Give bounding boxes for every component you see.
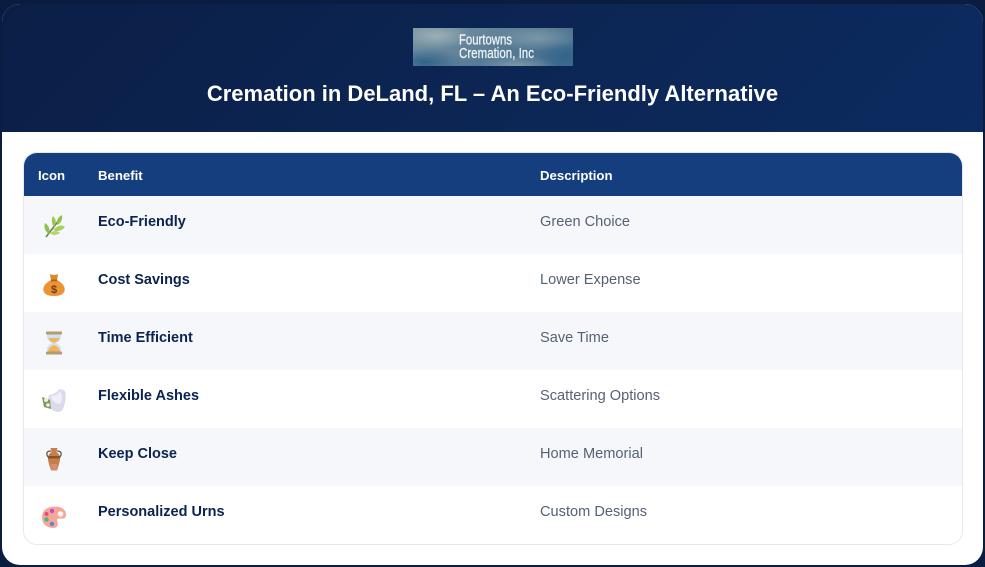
column heading: description: Description	[540, 168, 613, 183]
icon: artist palette	[42, 506, 66, 528]
icon: amphora	[46, 448, 62, 470]
title: Cremation in DeLand, FL – An Eco-Friendly Alternative	[207, 81, 778, 106]
icon: herb	[44, 215, 65, 238]
description: Custom Designs	[540, 504, 647, 520]
benefit name: Flexible Ashes	[98, 388, 199, 404]
row: Personalized Urns	[42, 504, 647, 528]
icon: money bag	[43, 274, 65, 296]
icon: hourglass	[46, 332, 62, 354]
row: Eco-Friendly	[24, 196, 962, 254]
logo: Fourtowns Cremation: Fourtowns	[459, 32, 512, 48]
icon: dove	[42, 390, 66, 412]
table header row	[24, 153, 962, 196]
row: Flexible Ashes	[42, 388, 660, 412]
column heading: benefit: Benefit	[98, 168, 143, 183]
benefit name: Cost Savings	[98, 272, 190, 288]
panel: benefits table	[23, 152, 963, 545]
panel: header banner	[2, 4, 983, 132]
row: Cost Savings	[43, 272, 641, 296]
benefit name: Time Efficient	[98, 330, 193, 346]
logo: Fourtowns Cremation: Cremation, Inc	[459, 45, 534, 62]
description: Lower Expense	[540, 272, 641, 288]
description: Green Choice	[540, 214, 630, 230]
logo: Fourtowns Cremation	[413, 28, 573, 66]
benefit name: Eco-Friendly	[98, 214, 186, 230]
icon: money bag: $	[51, 284, 57, 296]
benefit name: Personalized Urns	[98, 504, 225, 520]
description: Home Memorial	[540, 446, 643, 462]
row: Keep Close	[24, 428, 962, 486]
column heading: icon: Icon	[38, 168, 65, 183]
description: Scattering Options	[540, 388, 660, 404]
benefit name: Keep Close	[98, 446, 177, 462]
description: Save Time	[540, 330, 609, 346]
row: Time Efficient	[24, 312, 962, 370]
